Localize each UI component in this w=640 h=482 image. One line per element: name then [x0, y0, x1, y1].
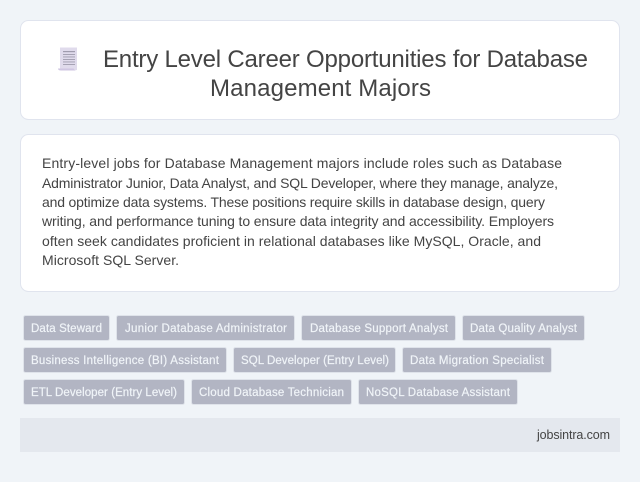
tag: NoSQL Database Assistant: NoSQL Database Assistant — [366, 387, 511, 399]
tag: Business Intelligence (BI) Assistant — [24, 348, 226, 372]
tag: ETL Developer (Entry Level) — [24, 380, 184, 404]
tag: Data Quality Analyst — [462, 316, 584, 340]
text block: description: Entry-level jobs for Database Management majors include roles such as Database — [42, 155, 562, 171]
tag: Database Support Analyst: Database Support Analyst — [310, 323, 449, 335]
tag: Business Intelligence (BI) Assistant: Business Intelligence (BI) Assistant — [31, 355, 220, 367]
tag: Data Steward: Data Steward — [31, 323, 102, 335]
title: Management Majors — [210, 75, 431, 102]
tag: Database Support Analyst — [302, 316, 456, 340]
panel: title card — [20, 20, 620, 120]
tag: Cloud Database Technician: Cloud Database Technician — [199, 387, 344, 399]
tag: SQL Developer (Entry Level) — [234, 348, 396, 372]
tag: ETL Developer (Entry Level): ETL Developer (Entry Level) — [31, 387, 177, 399]
text block: description: Administrator Junior, Data Analyst, and SQL Developer, where they manage, analyze, — [42, 175, 558, 191]
footer bar — [20, 418, 620, 452]
panel: description — [20, 134, 620, 292]
tag: Data Quality Analyst: Data Quality Analyst — [470, 323, 578, 335]
tag: Junior Database Administrator: Junior Database Administrator — [125, 323, 287, 335]
footer text: jobsintra.com: jobsintra.com — [536, 428, 610, 442]
tag: SQL Developer (Entry Level): SQL Developer (Entry Level) — [241, 355, 389, 367]
text block: description — [41, 155, 562, 268]
tags — [24, 316, 584, 404]
text block: description: often seek candidates proficient in relational databases like MySQL, Oracle, and — [42, 233, 541, 249]
tag: NoSQL Database Assistant — [358, 380, 518, 404]
text block: description: writing, and performance tuning to ensure data integrity and accessibility. Employers — [41, 213, 554, 229]
tag: Junior Database Administrator — [116, 316, 294, 340]
icon: document receipt — [58, 48, 77, 70]
tag: Data Migration Specialist — [402, 348, 552, 372]
tag: Data Migration Specialist: Data Migration Specialist — [410, 355, 545, 367]
tag: Cloud Database Technician — [192, 380, 352, 404]
title — [103, 46, 588, 102]
text block: description: and optimize data systems. These positions require skills in database design, query — [42, 194, 545, 210]
text block: description: Microsoft SQL Server. — [42, 252, 179, 268]
title: Entry Level Career Opportunities for Database — [103, 46, 588, 73]
tag: Data Steward — [24, 316, 110, 340]
